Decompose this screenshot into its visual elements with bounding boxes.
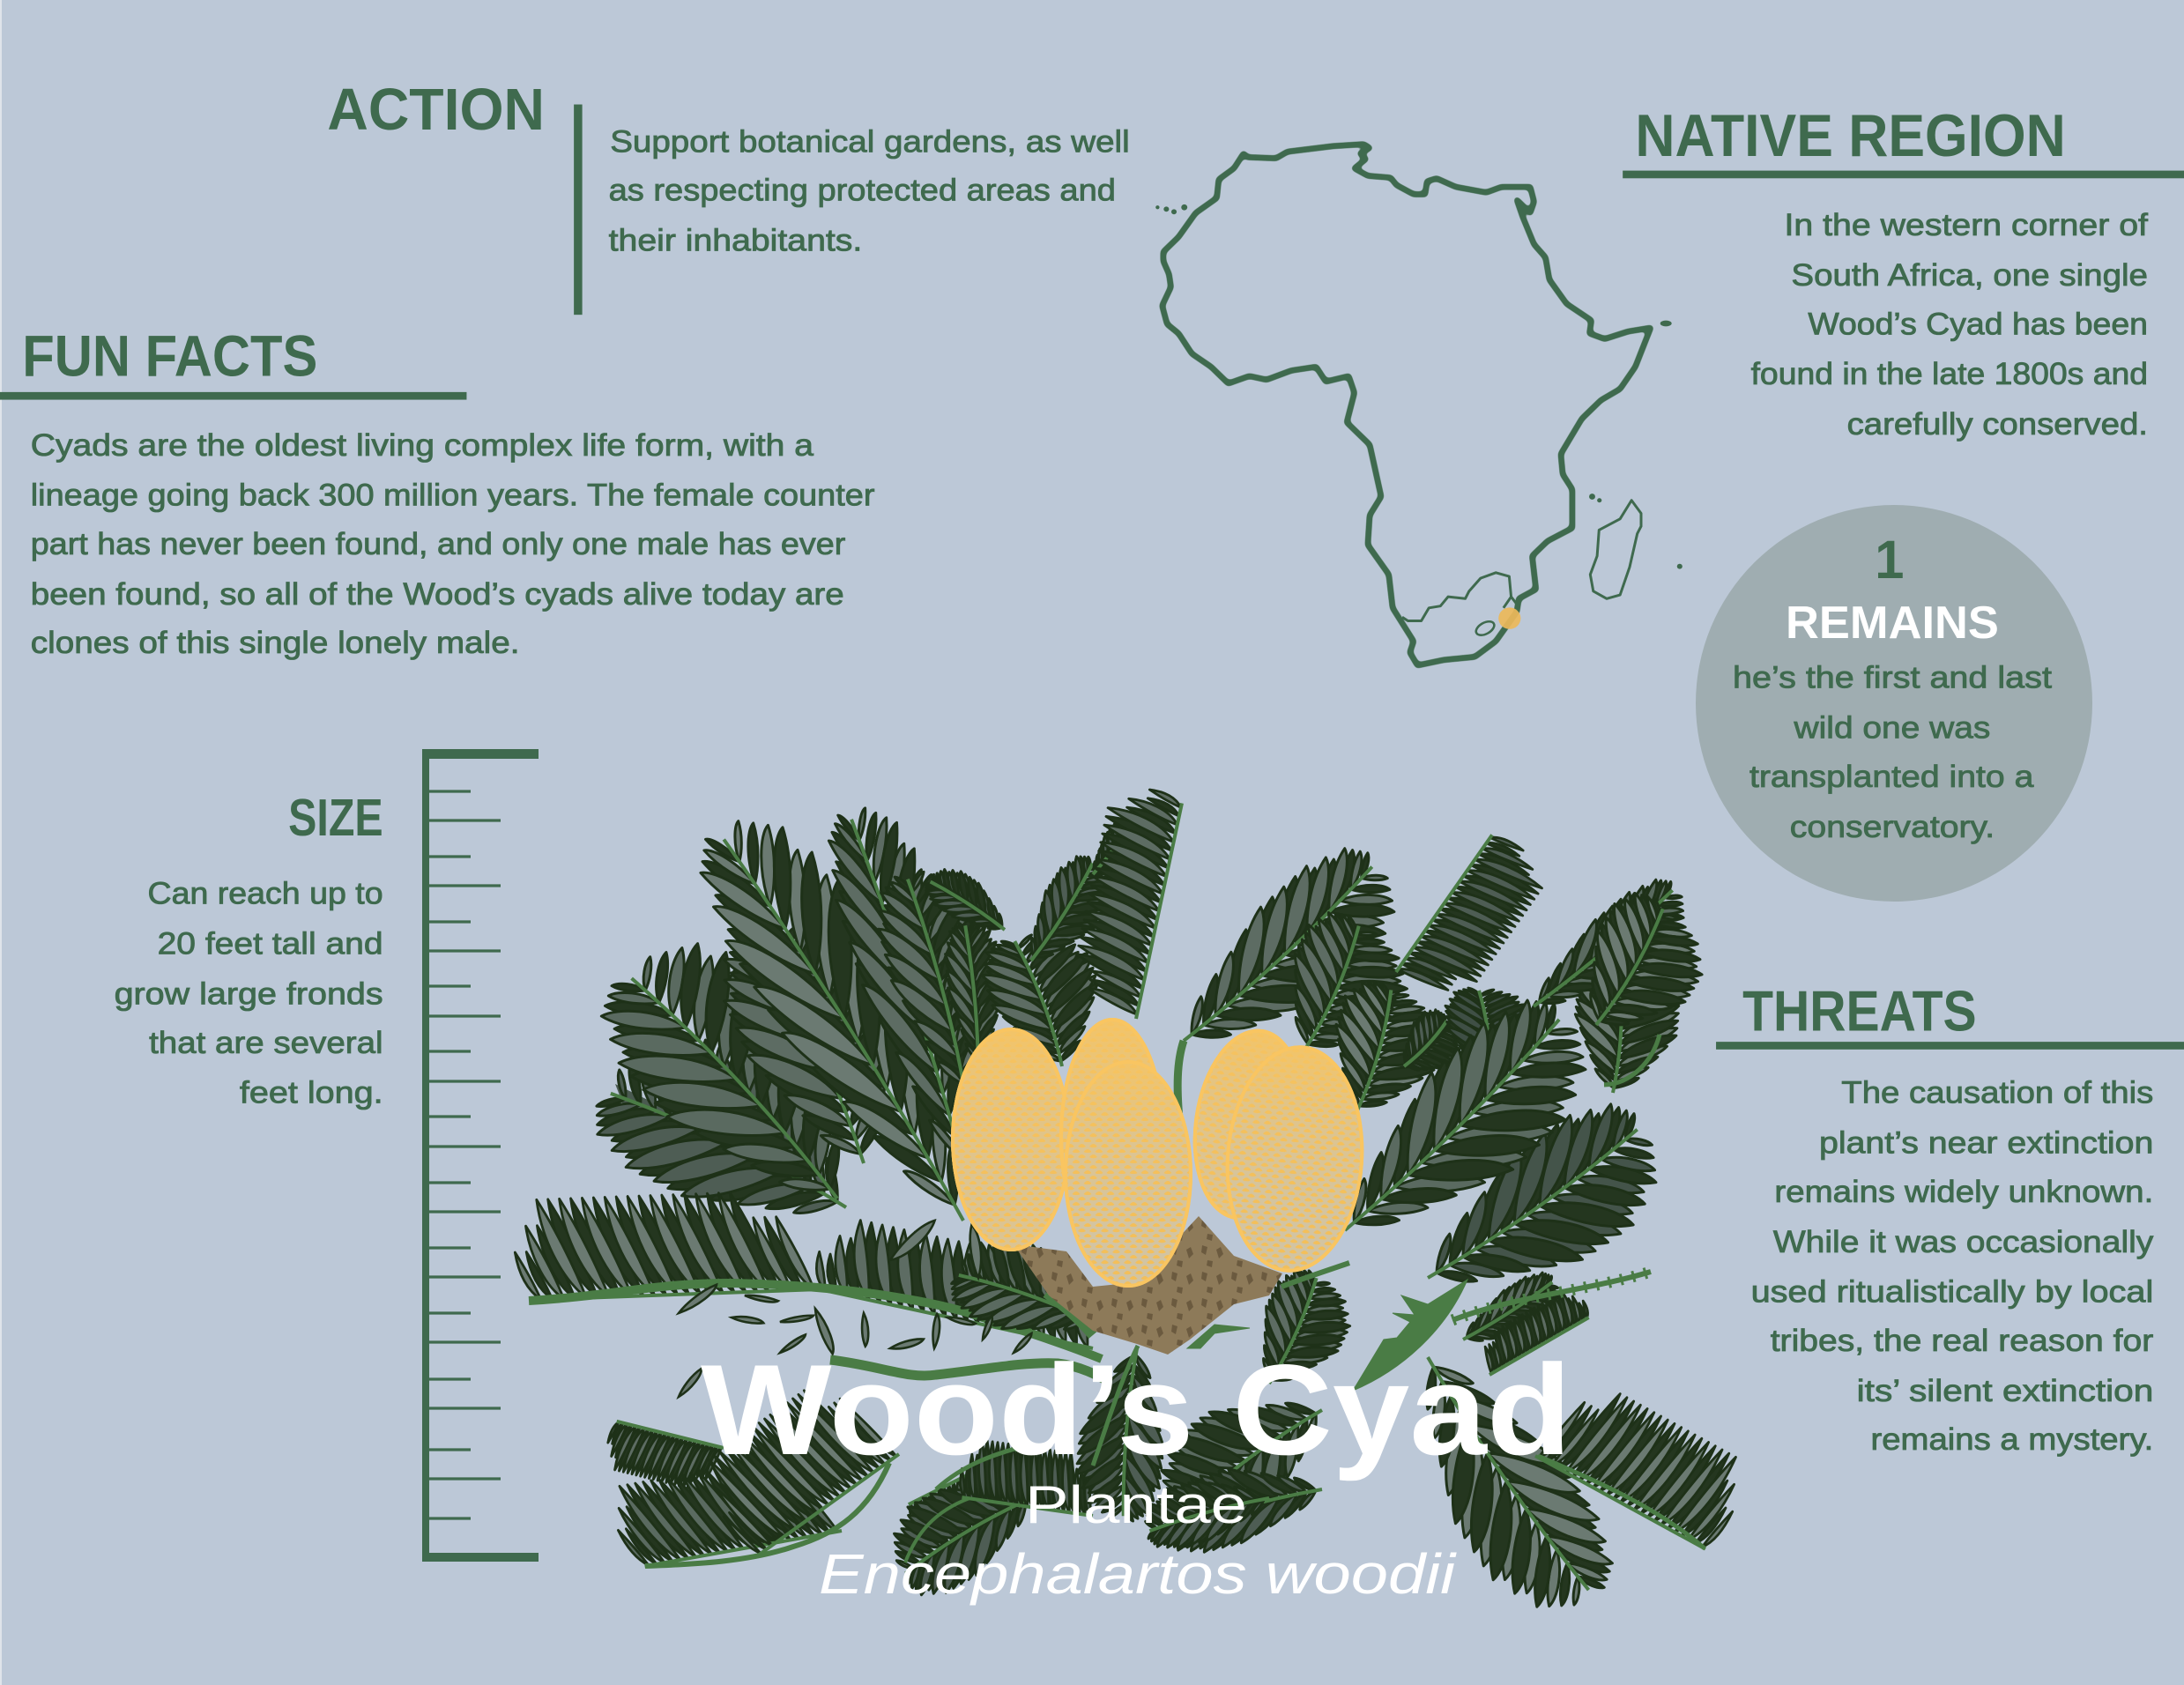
text: fun facts (31, 427, 875, 660)
africa outline (1163, 145, 1651, 665)
text: threats: its’ silent extinction (1857, 1373, 2153, 1408)
title: Wood’s Cyad (701, 1338, 1571, 1481)
text: size: grow large fronds (115, 976, 383, 1011)
africa map (1155, 145, 1683, 665)
cone: far left (953, 1029, 1069, 1250)
text: native region (1751, 207, 2148, 442)
plant illustration: cyad (502, 782, 1757, 1636)
madagascar (1590, 501, 1641, 598)
heading: size: SIZE (288, 788, 383, 847)
text: remains description: wild one was (1793, 710, 1990, 746)
native region rule (1623, 171, 2184, 178)
text: fun facts: lineage going back 300 million years. The female counter (31, 478, 875, 513)
cone: back right (1184, 1024, 1314, 1225)
text: fun facts: clones of this single lonely male. (31, 625, 519, 660)
text: native region: found in the late 1800s and (1751, 356, 2148, 391)
text: threats: While it was occasionally (1773, 1224, 2154, 1259)
fronds: upper right group (1146, 831, 1723, 1331)
range marker (1498, 607, 1520, 629)
frond: big horizontal left (502, 1191, 1109, 1359)
text: native region: In the western corner of (1784, 207, 2148, 242)
cones (953, 1020, 1370, 1286)
text: native region: carefully conserved. (1847, 406, 2148, 442)
fronds: lower right group (1067, 1260, 1757, 1636)
fronds: upper left group (577, 789, 1150, 1278)
text: action (609, 123, 1130, 257)
stat: number remaining: 1 (1875, 530, 1904, 590)
heading: native region: NATIVE REGION (1635, 102, 2066, 169)
text: threats: remains widely unknown. (1774, 1174, 2153, 1209)
text: threats (1751, 1075, 2154, 1457)
text: native region: Wood’s Cyad has been (1808, 306, 2148, 341)
text: threats: tribes, the real reason for (1771, 1323, 2153, 1358)
loose leaflets (672, 1214, 1035, 1397)
green stems and shoots (905, 1041, 1651, 1563)
text: fun facts: part has never been found, and only one male has ever (31, 526, 845, 561)
text: remains description (1733, 660, 2052, 844)
cone: back middle (1061, 1020, 1163, 1254)
fronds: lower left group (596, 1220, 1112, 1606)
text: action: Support botanical gardens, as well (610, 123, 1130, 159)
text: size (115, 876, 383, 1110)
size ruler (422, 749, 539, 1562)
trunk (1014, 1216, 1282, 1355)
threats rule (1716, 1042, 2184, 1050)
remains circle (1696, 505, 2092, 902)
text: size: 20 feet tall and (158, 926, 383, 961)
frond: top centre one-sided (1066, 782, 1184, 1019)
text: remains description: transplanted into a (1749, 759, 2034, 794)
text: action: as respecting protected areas and (609, 173, 1116, 208)
text: threats: The causation of this (1841, 1075, 2153, 1110)
text: size: that are several (149, 1025, 383, 1060)
subtitle: kingdom: Plantae (1025, 1475, 1247, 1534)
text: threats: plant’s near extinction (1819, 1125, 2153, 1161)
heading: action: ACTION (327, 77, 545, 143)
fun facts rule (0, 392, 466, 400)
text: native region: South Africa, one single (1791, 257, 2148, 293)
text: remains description: he’s the first and last (1733, 660, 2052, 695)
cone: front middle (1066, 1062, 1191, 1286)
text: fun facts: Cyads are the oldest living complex life form, with a (31, 427, 813, 463)
text: remains description: conservatory. (1790, 809, 1995, 844)
islands (1155, 204, 1683, 569)
south africa inner border (1402, 573, 1517, 621)
subtitle: latin name: Encephalartos woodii (819, 1542, 1457, 1606)
text: size: feet long. (240, 1075, 383, 1110)
text: action: their inhabitants. (609, 222, 862, 257)
heading: threats: THREATS (1742, 978, 1977, 1043)
lesotho (1474, 619, 1497, 638)
text: fun facts: been found, so all of the Wood’s cyads alive today are (31, 576, 844, 612)
cone: front right (1220, 1043, 1370, 1275)
text: threats: remains a mystery. (1870, 1421, 2153, 1457)
text: size: Can reach up to (148, 876, 383, 911)
heading: fun facts: FUN FACTS (22, 324, 317, 389)
text: threats: used ritualistically by local (1751, 1274, 2153, 1310)
action divider (574, 105, 583, 315)
stat label: remains: REMAINS (1786, 598, 1999, 649)
